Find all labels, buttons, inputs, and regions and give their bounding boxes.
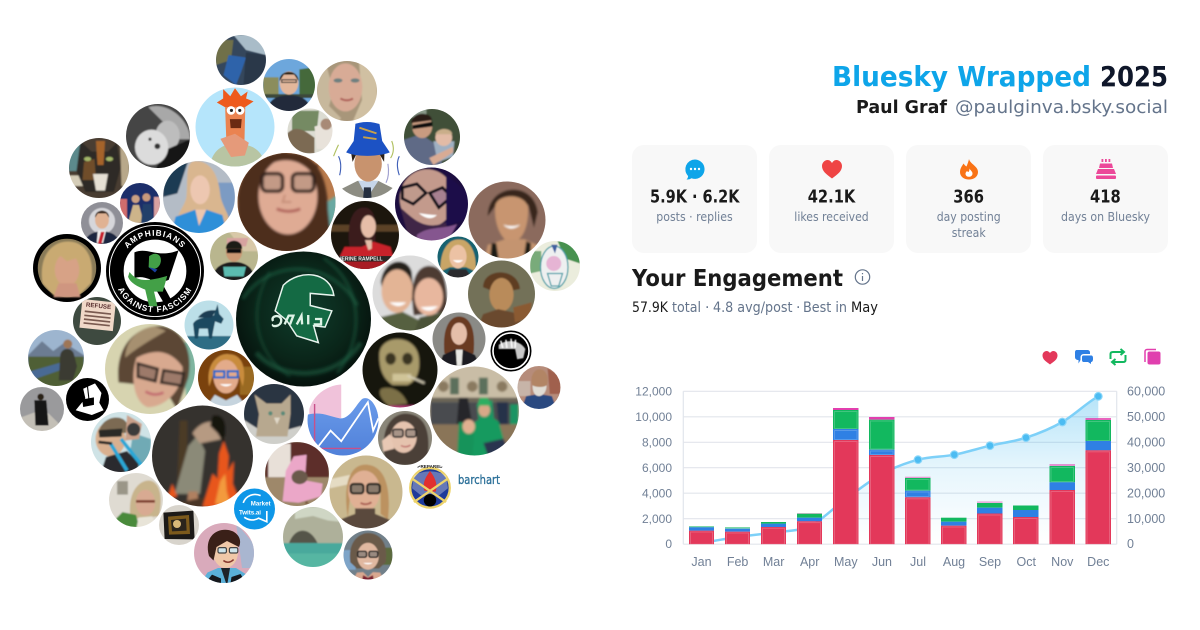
axis labels right: 30,000 xyxy=(1127,461,1165,475)
bar: Mar xyxy=(761,522,786,544)
avatar: alpaca and man xyxy=(288,108,332,154)
month labels: Jan xyxy=(691,555,712,569)
avatar: cartoon man with glasses xyxy=(191,520,257,586)
axis labels right: 60,000 xyxy=(1127,384,1165,398)
axis labels left: 10,000 xyxy=(635,410,672,424)
stat card: likes received: likes received xyxy=(794,209,869,224)
bar: May xyxy=(833,408,858,544)
avatar: Amphibians Against Fascism logo xyxy=(106,222,204,320)
axis labels right: 20,000 xyxy=(1127,486,1165,500)
month labels: Jul xyxy=(910,555,926,569)
title: Bluesky Wrapped xyxy=(832,61,1091,93)
avatar: bald bearded man xyxy=(515,364,563,411)
profile name and handle: @paulginva.bsky.social xyxy=(955,97,1168,118)
avatar: unicorn silhouette xyxy=(184,300,234,350)
stat card: posts and replies xyxy=(632,145,757,253)
axis labels right: 50,000 xyxy=(1127,410,1165,424)
avatar: man in suit with red tie xyxy=(81,202,123,244)
avatar: Amphibians Against Fascism logo: AGAINST FASCISM xyxy=(118,288,192,312)
icon: cake xyxy=(1096,159,1116,179)
avatar: smiling couple xyxy=(372,256,448,330)
avatar: Prepared badge: PREPARED xyxy=(417,464,443,469)
axis labels left: 8,000 xyxy=(642,436,672,450)
cumulative dots xyxy=(914,392,1102,464)
avatar: Market Twits logo: Twits.ai xyxy=(239,509,261,516)
month labels: Aug xyxy=(943,555,965,569)
avatar: Market Twits logo xyxy=(232,486,277,532)
combo chart: monthly engagement xyxy=(635,384,1165,569)
avatar: Beaker muppet xyxy=(196,88,274,166)
avatar: sea cave xyxy=(280,504,346,570)
avatar: woman with reading glasses xyxy=(109,473,163,527)
avatar: tortoiseshell cat xyxy=(69,138,129,198)
stat card: posts and replies: posts · replies xyxy=(656,209,733,224)
avatar: man with Happy New Year hat xyxy=(333,122,400,198)
avatar cluster xyxy=(20,35,580,583)
avatar: smiling bearded man in purple xyxy=(395,168,468,240)
cumulative line xyxy=(702,396,1098,543)
bar: Oct xyxy=(1013,506,1038,544)
stat card: likes received xyxy=(769,145,894,253)
avatar: monk figure in hallway xyxy=(20,387,64,431)
icon: replies bubbles xyxy=(1075,350,1093,364)
bar: Jun xyxy=(869,417,894,544)
engagement summary: total xyxy=(672,300,701,316)
avatar: pug in pink coat xyxy=(265,442,329,506)
heading: Your Engagement: Your Engagement xyxy=(631,264,843,292)
axis labels right: 10,000 xyxy=(1127,512,1165,526)
month labels: Oct xyxy=(1016,555,1036,569)
avatar: man with glasses outdoors xyxy=(263,59,315,111)
bar: Jan xyxy=(689,526,714,544)
avatar: crowd in green on steps xyxy=(426,362,523,460)
icon: likes heart xyxy=(1042,351,1058,364)
month labels: Feb xyxy=(727,555,748,569)
bar: Dec xyxy=(1086,418,1111,544)
avatar: woman with glasses and long hair xyxy=(378,411,432,465)
icon: flame xyxy=(960,159,978,180)
avatar: Amphibians Against Fascism logo: AMPHIBIANS xyxy=(125,230,185,248)
profile name and handle: Paul Graf xyxy=(856,97,947,118)
bar: Nov xyxy=(1050,464,1075,544)
profile name and handle xyxy=(856,97,1168,118)
avatar: white ship on black xyxy=(66,378,109,421)
avatar: blonde woman small on teal xyxy=(438,236,478,278)
axis labels right xyxy=(1127,384,1165,551)
month labels: Jun xyxy=(872,555,892,569)
axis labels left: 6,000 xyxy=(642,461,672,475)
axis labels right: 40,000 xyxy=(1127,436,1165,450)
avatar: Pompeian fresco portrait xyxy=(468,260,535,328)
avatar: Market Twits logo: Market xyxy=(251,501,271,508)
icon: quote squares xyxy=(1145,350,1160,364)
avatar: man in sunglasses with baby xyxy=(404,109,460,165)
bar: Aug xyxy=(941,518,966,544)
avatar: woman with glasses and bangs xyxy=(105,324,195,414)
engagement summary: Best in xyxy=(803,300,847,316)
month labels: May xyxy=(834,555,858,569)
stat card: likes received: 42.1K xyxy=(808,188,856,208)
avatar: woman with long brown hair in suit xyxy=(430,310,488,368)
stat card: days on Bluesky xyxy=(1043,145,1168,253)
title: 2025 xyxy=(1100,61,1168,93)
avatar: Catherine Rampell TV still xyxy=(331,201,399,269)
logo: barchart wordmark: barchart xyxy=(458,473,500,487)
avatar: woman with glasses large xyxy=(238,153,336,251)
stat card: day posting streak: 366 xyxy=(953,188,984,208)
axis labels left xyxy=(635,384,672,551)
bar: Sep xyxy=(977,501,1002,544)
month labels: Sep xyxy=(979,555,1001,569)
avatar: blonde woman close-up xyxy=(317,61,377,121)
avatar: man with blue glasses xyxy=(198,350,254,406)
engagement summary: · xyxy=(796,300,800,316)
avatar: older woman in black ring xyxy=(33,234,101,302)
avatar: gray tabby cat xyxy=(244,384,304,444)
axis labels left: 4,000 xyxy=(642,486,672,500)
stat card: days on Bluesky: days on Bluesky xyxy=(1061,209,1151,224)
bar: Jul xyxy=(905,477,930,544)
avatar: refuse sign xyxy=(73,297,121,345)
bar: Feb xyxy=(725,527,750,544)
month labels: Dec xyxy=(1087,555,1109,569)
avatar: curly-haired woman with glasses xyxy=(341,528,395,582)
avatar: man in mountain landscape xyxy=(28,330,84,386)
avatar: Van Gogh skull xyxy=(359,329,441,411)
avatar: smiling woman with dark hair xyxy=(468,182,546,258)
month labels xyxy=(691,555,1109,569)
stat card: day posting streak: streak xyxy=(952,225,986,240)
month labels: Nov xyxy=(1051,555,1074,569)
axis labels right: 0 xyxy=(1127,537,1134,551)
engagement summary: 57.9K xyxy=(632,300,669,316)
stat card: day posting streak: day posting xyxy=(937,209,1001,224)
icon: chat bubble xyxy=(685,160,705,180)
stacked bars xyxy=(689,408,1111,544)
icon: repost arrows xyxy=(1110,349,1126,365)
chart legend icons xyxy=(1042,349,1160,365)
axis labels left: 0 xyxy=(665,537,672,551)
avatar: two people with flags xyxy=(120,183,160,223)
avatar: framed picture xyxy=(159,505,199,545)
avatar: lake xyxy=(216,35,266,85)
avatar: two people with headsets xyxy=(91,412,151,472)
avatar: chart logo xyxy=(308,384,378,456)
icon: info xyxy=(855,270,870,284)
icon: heart xyxy=(822,160,842,178)
avatar: black and white woman with dog xyxy=(126,104,190,168)
axis labels left: 12,000 xyxy=(635,384,672,398)
stat card: posts and replies: 5.9K · 6.2K xyxy=(650,188,741,208)
avatar: Frankenstein bride image xyxy=(488,328,534,374)
avatar: blonde woman in glasses and turtleneck xyxy=(326,452,406,532)
cumulative area xyxy=(702,396,1098,544)
month labels: Mar xyxy=(763,555,784,569)
avatar: Prepared badge xyxy=(405,461,455,511)
avatar: blonde woman in blue xyxy=(163,161,235,233)
avatar: egg drawing xyxy=(530,241,580,291)
stat card: days on Bluesky: 418 xyxy=(1090,188,1121,208)
engagement summary: · xyxy=(705,300,709,316)
month labels: Apr xyxy=(800,555,819,569)
engagement summary: 4.8 avg/post xyxy=(713,300,793,316)
bar: Apr xyxy=(797,513,822,544)
axis labels left: 2,000 xyxy=(642,512,672,526)
stat card: day posting streak xyxy=(906,145,1031,253)
avatar: Spartan helmet logo xyxy=(236,252,371,386)
avatar: painting of woman over flames xyxy=(152,406,253,506)
engagement summary: May xyxy=(851,300,878,316)
avatar: man in sunglasses with child xyxy=(210,232,258,280)
engagement summary xyxy=(632,300,878,316)
